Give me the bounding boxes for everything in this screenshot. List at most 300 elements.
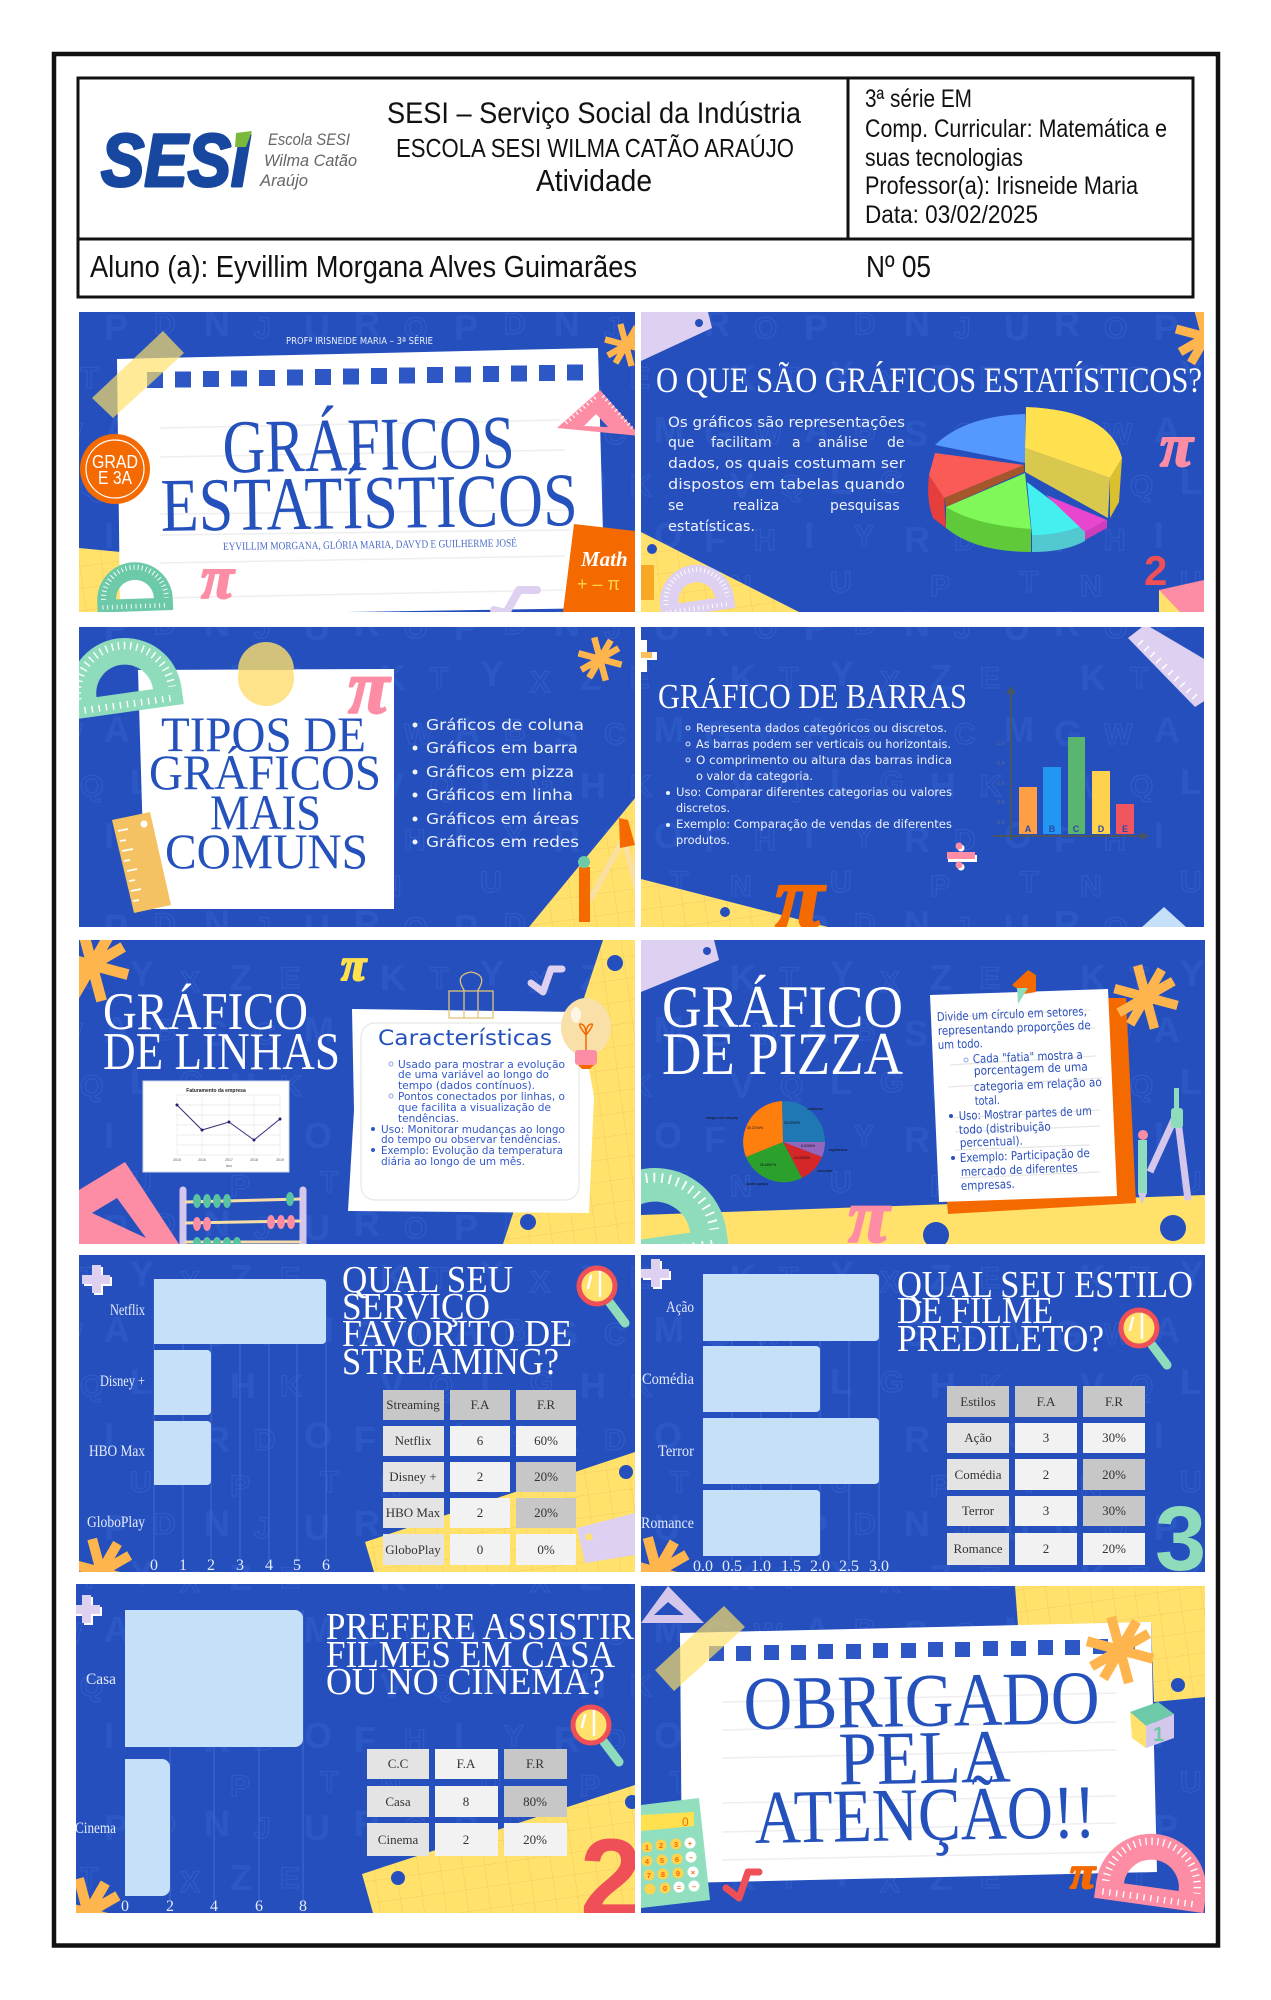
badge [80, 434, 150, 504]
chart: pie: vegetariana [829, 1148, 847, 1152]
panel: slide 10 thank you [641, 1586, 1213, 1913]
table: Terror [962, 1503, 995, 1518]
chart: pie: quatro queijos [746, 1182, 768, 1186]
panel: slide 8 film genre survey [622, 1255, 1206, 1606]
icon: root [494, 590, 537, 613]
chart: line: 2017 [225, 1158, 233, 1162]
icon: protractor [1094, 1827, 1213, 1913]
table: Ação [964, 1430, 992, 1445]
icon: plus [72, 1595, 102, 1625]
body list: Representa dados categóricos ou discretos. [696, 722, 947, 735]
chart: pie: 5.9259% [801, 1144, 816, 1148]
top caption: PROFª IRISNEIDE MARIA – 3ª SÉRIE [286, 335, 433, 347]
body text: se [668, 498, 684, 514]
graph paper corner [641, 879, 828, 927]
icon: calculator: – [689, 1853, 693, 1862]
title: STREAMING? [342, 1341, 559, 1383]
icon: asterisk [578, 637, 622, 681]
icon: math notebook: Math [580, 547, 628, 571]
chart: line: 2015 [173, 1158, 181, 1162]
paper holes [147, 364, 583, 388]
icon: root [531, 969, 562, 992]
logo: SESI: Escola SESI [268, 130, 350, 149]
chart: horizontal bars: 2 [166, 1898, 174, 1915]
table: 0 [477, 1542, 483, 1557]
note text: percentual). [960, 1134, 1023, 1150]
chart: horizontal bars: 4 [210, 1898, 218, 1915]
chart: bars [993, 686, 1149, 840]
body text: dispostos em tabelas quando [668, 477, 905, 493]
graph paper [503, 940, 635, 1244]
body text: de [887, 435, 904, 451]
note text: empresas. [961, 1177, 1015, 1193]
table: 3 [1043, 1503, 1049, 1518]
chart: horizontal bars: 1.5 [781, 1558, 801, 1575]
table: 0% [537, 1542, 555, 1557]
table: F.R [1105, 1394, 1123, 1409]
bullet list: Gráficos em áreas [426, 810, 579, 828]
title: TIPOS DE [161, 706, 366, 762]
icon: calculator: 7 [647, 1871, 651, 1880]
chart: pie: 25.9259% [784, 1121, 801, 1125]
table: F.A [1037, 1394, 1056, 1409]
icon: pi: π [1160, 413, 1195, 479]
icon: set square [1142, 907, 1186, 927]
class details: Professor(a): Irisneide Maria [865, 172, 1138, 200]
title: COMUNS [165, 823, 368, 879]
icon: calculator: 3 [674, 1840, 678, 1849]
panel: slide 4 bar chart [641, 627, 1206, 947]
chart: horizontal bars: 3 [236, 1557, 244, 1574]
icon: root [726, 1872, 759, 1898]
table: Casa [385, 1794, 411, 1809]
logo: SESI [101, 119, 357, 202]
note text: Uso: Mostrar partes de um [959, 1104, 1092, 1123]
note text: Divide um círculo em setores, [937, 1004, 1087, 1024]
title: ESTATÍSTICOS [160, 458, 578, 548]
title: PREDILETO? [897, 1318, 1104, 1360]
chart: horizontal bars: 0.5 [722, 1558, 742, 1575]
chart: horizontal bars: 2.0 [810, 1558, 830, 1575]
title [342, 1259, 572, 1383]
title: MAIS [210, 784, 321, 840]
chart: horizontal bars: 3.0 [869, 1558, 889, 1575]
chart: horizontal bars: Terror [658, 1443, 695, 1460]
chart: pie: 26.6667% [760, 1163, 777, 1167]
icon: calculator [641, 1798, 710, 1908]
table: 2 [477, 1469, 483, 1484]
icon: math notebook [563, 524, 635, 612]
card list: tendências. [398, 1112, 459, 1125]
yellow band [641, 1195, 1205, 1248]
body text: estatísticas. [668, 519, 755, 535]
note text: Cada "fatia" mostra a [973, 1048, 1083, 1066]
table: GloboPlay [385, 1542, 441, 1557]
card list: diária ao longo de um mês. [381, 1155, 525, 1168]
body text: a [792, 435, 801, 451]
table: 30% [1102, 1503, 1126, 1518]
icon: calculator: 5 [660, 1856, 664, 1865]
chart: bars: 0.8 [997, 761, 1005, 767]
chart: pie [706, 1101, 847, 1186]
paper holes [709, 1639, 1135, 1661]
chart: line: Faturamento da empresa [186, 1088, 246, 1094]
chart: bars: C [1073, 824, 1080, 834]
torn paper [680, 1622, 1157, 1883]
panel: slide 9 cinema survey [54, 1584, 642, 1948]
panel: slide 5 line chart [56, 929, 635, 1249]
icon: protractor [79, 638, 184, 719]
icon: compass [1138, 1088, 1188, 1204]
card list: Pontos conectados por linhas, o [398, 1090, 565, 1103]
chart: pie: 30.3704% [747, 1126, 764, 1130]
icon: pi: π [848, 1175, 892, 1259]
icon: magnifier [579, 1268, 625, 1323]
icon: protractor [660, 564, 736, 612]
note text: mercado de diferentes [961, 1161, 1078, 1179]
bullet list: Gráficos em linha [426, 786, 573, 804]
panel: slide 3 chart types [61, 627, 640, 927]
table: Netflix [395, 1433, 432, 1448]
chart: line: 2018 [250, 1158, 258, 1162]
class details: suas tecnologias [865, 144, 1023, 172]
icon: calculator: 8 [661, 1870, 665, 1879]
card list: Uso: Monitorar mudanças ao longo [381, 1123, 565, 1136]
chart: horizontal bars: Comédia [642, 1371, 694, 1388]
chart: horizontal bars: Romance [641, 1515, 694, 1532]
icon: divide [947, 842, 977, 870]
chart: horizontal bars: 1.0 [751, 1558, 771, 1575]
chart: horizontal bars [641, 1274, 889, 1575]
icon: calculator: × [691, 1868, 696, 1877]
body text [668, 415, 905, 535]
chart: bars: 0.2 [997, 820, 1005, 826]
table: 2 [477, 1505, 483, 1520]
table [383, 1390, 576, 1565]
badge: E 3A [98, 468, 132, 488]
title [149, 706, 381, 879]
title: ATENÇÃO!! [754, 1770, 1096, 1860]
chart: horizontal bars: 5 [293, 1557, 301, 1574]
body text: realiza [733, 498, 779, 514]
table: Disney + [389, 1469, 437, 1484]
bullet list: Gráficos em pizza [426, 763, 574, 781]
title: FAVORITO DE [342, 1313, 572, 1355]
school heading [387, 97, 801, 198]
bullet list: Gráficos em redes [426, 833, 579, 851]
icon: magnifier [573, 1707, 619, 1762]
authors: EYVILLIM MORGANA, GLÓRIA MARIA, DAVYD E GUILHERME JOSÉ [223, 537, 517, 553]
icon: pi: π [201, 545, 236, 611]
body text: dados, os quais costumam ser [668, 456, 905, 472]
chart: pie: chocolate [817, 1169, 833, 1173]
card [348, 1009, 594, 1213]
table: 2 [1043, 1541, 1049, 1556]
icon: abacus [183, 1190, 303, 1249]
icon: plus [82, 1265, 112, 1295]
icon: calculator: 1 [645, 1843, 649, 1852]
icon: ruler [112, 812, 171, 913]
title: OBRIGADO [743, 1656, 1100, 1746]
note text: Exemplo: Participação de [960, 1146, 1090, 1165]
icon: asterisk [54, 1878, 122, 1948]
chart: horizontal bars: 2 [207, 1557, 215, 1574]
note text: total. [975, 1093, 1000, 1108]
icon: asterisk [56, 929, 128, 1001]
table: Estilos [960, 1394, 996, 1409]
icon: set square [79, 1162, 179, 1244]
title [103, 983, 340, 1081]
title: GRÁFICO [662, 974, 903, 1040]
table: F.A [457, 1756, 476, 1771]
table: F.A [471, 1397, 490, 1412]
card list: Exemplo: Evolução da temperatura [381, 1144, 563, 1157]
school heading: ESCOLA SESI WILMA CATÃO ARAÚJO [396, 133, 794, 163]
chart: horizontal bars: Disney + [100, 1373, 145, 1390]
table: 20% [523, 1832, 547, 1847]
icon: calculator: – [692, 1882, 696, 1891]
class details [865, 85, 1167, 229]
class details: Comp. Curricular: Matemática e [865, 115, 1167, 143]
body list: As barras podem ser verticais ou horizontais. [696, 738, 951, 751]
icon: light bulb [561, 998, 611, 1069]
chart: pie: 10.3333% [794, 1156, 811, 1160]
title: DE LINHAS [103, 1023, 340, 1081]
header table [78, 78, 1193, 297]
card list [371, 1058, 565, 1168]
table [367, 1749, 567, 1856]
body list [666, 722, 952, 847]
bullet list: Gráficos em barra [426, 739, 578, 757]
icon: set square [641, 1586, 704, 1623]
icon: protractor [574, 1159, 729, 1271]
chart: horizontal bars: HBO Max [89, 1443, 145, 1460]
title: GRÁFICOS [222, 400, 515, 490]
panel: slide 2 what are charts [641, 307, 1236, 618]
table: 3 [1043, 1430, 1049, 1445]
body text: análise [818, 435, 868, 451]
title: PELA [838, 1715, 1011, 1801]
title: OU NO CINEMA? [326, 1661, 605, 1703]
graph paper [365, 1452, 635, 1572]
icon: asterisk [1087, 1617, 1153, 1683]
school heading: Atividade [536, 163, 652, 198]
icon: ruler [641, 312, 712, 361]
table: 60% [534, 1433, 558, 1448]
graph paper [362, 1785, 639, 1913]
graph paper [1015, 1586, 1205, 1702]
class details: Data: 03/02/2025 [865, 201, 1038, 229]
graph paper with compass [529, 798, 640, 927]
torn paper [117, 348, 605, 612]
chart: horizontal bars: Casa [86, 1671, 116, 1688]
icon: magnifier [1121, 1310, 1167, 1365]
table: 2 [463, 1832, 469, 1847]
tape circle [238, 642, 294, 706]
title [326, 1606, 635, 1703]
icon: calculator: 0 [682, 1815, 689, 1829]
chart: horizontal bars: Ação [666, 1299, 694, 1316]
class details: 3ª série EM [865, 85, 972, 113]
chart: line: Ano [226, 1164, 232, 1168]
card list: de uma variável ao longo do [398, 1068, 549, 1081]
icon: pi: π [775, 848, 827, 947]
body list: produtos. [676, 834, 730, 847]
icon: asterisk [604, 323, 635, 367]
chart: bars: 0.6 [997, 781, 1005, 787]
bullet list: Gráficos de coluna [426, 716, 584, 734]
icon: small white shape [641, 640, 657, 672]
icon: asterisk [1114, 966, 1178, 1028]
body list: o valor da categoria. [696, 770, 813, 783]
chart: bars: 0.4 [997, 800, 1005, 806]
card list: tempo (dados contínuos). [398, 1079, 535, 1092]
icon: calculator: 9 [676, 1869, 680, 1878]
table: 6 [477, 1433, 484, 1448]
badge: GRAD [92, 452, 138, 472]
body list: discretos. [676, 802, 730, 815]
logo: SESI: Araújo [259, 171, 308, 190]
chart: horizontal bars: 2.5 [839, 1558, 859, 1575]
chart: horizontal bars: 6 [255, 1898, 263, 1915]
icon: ruler [641, 940, 719, 992]
table: 20% [1102, 1541, 1126, 1556]
title [897, 1264, 1193, 1360]
icon: math notebook: + – π [577, 574, 620, 594]
title: FILMES EM CASA [326, 1634, 616, 1676]
table: Comédia [955, 1467, 1002, 1482]
paper [138, 669, 394, 909]
chart: horizontal bars: 6 [322, 1557, 330, 1574]
table: Cinema [378, 1832, 418, 1847]
chart: horizontal bars: 0 [121, 1898, 129, 1915]
chart: line: 2019 [276, 1158, 284, 1162]
card list: Usado para mostrar a evolução [398, 1058, 565, 1071]
graph paper corner [641, 532, 799, 612]
tape [92, 331, 184, 418]
chart: horizontal bars: 0 [150, 1557, 158, 1574]
table: C.C [388, 1756, 408, 1771]
title: QUAL SEU [342, 1259, 513, 1301]
tape [655, 1606, 745, 1691]
title: GRÁFICOS [149, 744, 381, 800]
heading: GRÁFICO DE BARRAS [658, 677, 967, 716]
title [162, 405, 574, 531]
icon: calculator: 0 [663, 1884, 667, 1893]
chart: bars: B [1049, 824, 1056, 834]
table: F.R [526, 1756, 544, 1771]
chart: horizontal bars: Netflix [110, 1302, 145, 1319]
table: 2 [1043, 1467, 1049, 1482]
icon: pin [1012, 970, 1036, 1004]
chart: bars: E [1122, 824, 1128, 834]
title: QUAL SEU ESTILO [897, 1264, 1193, 1306]
note card [930, 989, 1136, 1214]
title [743, 1656, 1100, 1860]
table: Streaming [386, 1397, 440, 1412]
body list: Exemplo: Comparação de vendas de diferentes [676, 818, 952, 831]
icon: pi: π [348, 646, 392, 730]
icon: cube [1130, 1702, 1174, 1748]
student number: Nº 05 [866, 249, 931, 284]
note text [937, 1004, 1102, 1193]
icon: pi: π [1070, 1847, 1097, 1898]
title: GRÁFICO [103, 983, 308, 1041]
body text: pesquisas [830, 498, 900, 514]
chart: bars: D [1098, 824, 1105, 834]
card list: do tempo ou observar tendências. [381, 1133, 561, 1146]
chart: pie: frango com catupiry [706, 1116, 738, 1120]
card list: que facilita a visualização de [398, 1101, 551, 1114]
note text: porcentagem de uma [974, 1060, 1088, 1078]
chart: horizontal bars: 4 [265, 1557, 273, 1574]
chart: horizontal bars: Cinema [75, 1820, 116, 1837]
icon: calculator: = [677, 1883, 682, 1892]
chart: line [143, 1081, 289, 1172]
note text: categoria em relação ao [974, 1075, 1102, 1094]
chart: bars: 1.0 [997, 741, 1005, 747]
body text: Os gráficos são representações [668, 415, 905, 431]
body list: Uso: Comparar diferentes categorias ou valores [676, 786, 952, 799]
icon: ruler [577, 1513, 635, 1563]
icon: binder clip [449, 972, 493, 1018]
chart: horizontal bars: GloboPlay [87, 1514, 145, 1531]
note text: todo (distribuição [959, 1119, 1051, 1137]
body list: O comprimento ou altura das barras indica [696, 754, 952, 767]
title: PREFERE ASSISTIR [326, 1606, 635, 1648]
table: 80% [523, 1794, 547, 1809]
icon: asterisk [622, 1538, 692, 1606]
icon: cube [1159, 580, 1204, 612]
panel: slide 7 streaming survey [68, 1255, 635, 1605]
note text: representando proporções de [938, 1018, 1091, 1038]
icon: ruler [1128, 627, 1206, 707]
table: HBO Max [386, 1505, 441, 1520]
student name: Aluno (a): Eyvillim Morgana Alves Guimarães [90, 249, 637, 284]
chart: bars: A [1025, 824, 1032, 834]
icon: cube: 1 [1153, 1724, 1164, 1746]
logo: SESI: Wilma Catão [264, 151, 357, 170]
chart: horizontal bars: 0.0 [693, 1558, 713, 1575]
icon: protractor [96, 561, 173, 613]
icon: number two: 2 [580, 1816, 642, 1941]
table: 30% [1102, 1430, 1126, 1445]
table [947, 1386, 1145, 1565]
chart: pie: calabresa [807, 1107, 823, 1111]
chart: horizontal bars [75, 1610, 307, 1915]
title: DE FILME [897, 1290, 1053, 1332]
title [662, 974, 903, 1087]
table: 20% [534, 1469, 558, 1484]
body text: que [668, 435, 694, 451]
chart: line: 2016 [198, 1158, 206, 1162]
icon: calculator: 4 [645, 1857, 650, 1866]
icon: plus [641, 1259, 671, 1289]
table: F.R [537, 1397, 555, 1412]
table: 20% [1102, 1467, 1126, 1482]
note text: um todo. [938, 1036, 983, 1052]
icon: asterisk [1174, 312, 1204, 366]
icon: calculator: 2 [659, 1841, 663, 1850]
table: 20% [534, 1505, 558, 1520]
card heading: Características [378, 1026, 552, 1050]
chart: horizontal bars: 1 [179, 1557, 187, 1574]
table: 8 [463, 1794, 469, 1809]
icon: number three: 3 [1155, 1488, 1206, 1590]
school heading: SESI – Serviço Social da Indústria [387, 97, 801, 130]
icon: pi: π [341, 939, 368, 990]
icon: set square [557, 390, 640, 436]
